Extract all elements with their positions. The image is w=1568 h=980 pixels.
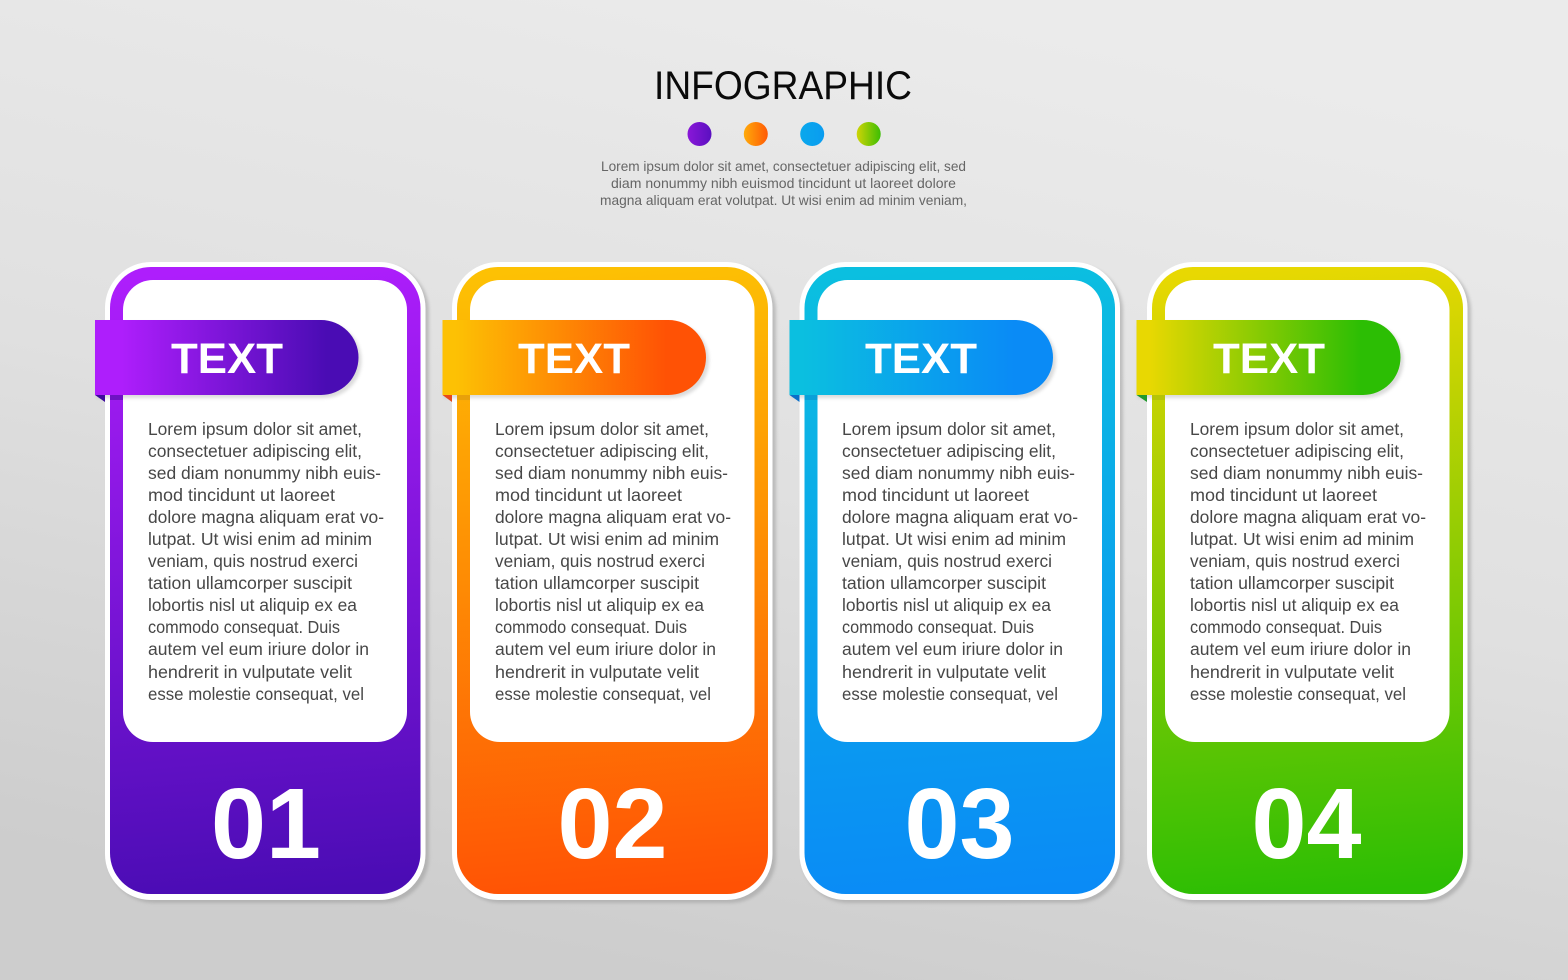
body text: card 01: Lorem ipsum dolor sit amet, — [148, 419, 362, 439]
ribbon: card 02 header — [442, 320, 709, 402]
legend dots — [688, 122, 881, 146]
body text: card 03: dolore magna aliquam erat vo- — [842, 507, 1078, 527]
body text: card 02: lutpat. Ut wisi enim ad minim — [495, 529, 719, 549]
intro text — [600, 159, 967, 208]
body text: card 04: hendrerit in vulputate velit — [1190, 662, 1394, 682]
number 01: 01 — [211, 768, 321, 880]
body text: card 03: hendrerit in vulputate velit — [842, 662, 1046, 682]
body text: card 01: dolore magna aliquam erat vo- — [148, 507, 384, 527]
body text: card 02: hendrerit in vulputate velit — [495, 662, 699, 682]
ribbon: card 01 header — [95, 320, 362, 402]
body text: card 01: autem vel eum iriure dolor in — [148, 639, 369, 659]
body text: card 04: commodo consequat. Duis — [1190, 617, 1382, 637]
body text: card 01: sed diam nonummy nibh euis- — [148, 463, 381, 483]
body text: card 02: consectetuer adipiscing elit, — [495, 441, 709, 461]
body text: card 04: autem vel eum iriure dolor in — [1190, 639, 1411, 659]
panel: card 04 green — [1136, 262, 1471, 903]
body text: card 04 — [1190, 419, 1426, 704]
body text: card 02: autem vel eum iriure dolor in — [495, 639, 716, 659]
body text: card 03: lobortis nisl ut aliquip ex ea — [842, 595, 1051, 615]
body text: card 03 — [842, 419, 1078, 704]
ribbon: card 04 header — [1136, 320, 1404, 402]
body text: card 01: lobortis nisl ut aliquip ex ea — [148, 595, 357, 615]
number 04: 04 — [1252, 768, 1362, 880]
body text: card 02: lobortis nisl ut aliquip ex ea — [495, 595, 704, 615]
body text: card 02: tation ullamcorper suscipit — [495, 573, 699, 593]
panel: card 03 blue — [790, 262, 1123, 903]
body text: card 04: esse molestie consequat, vel — [1190, 684, 1406, 704]
body text: card 01: consectetuer adipiscing elit, — [148, 441, 362, 461]
ribbon: card 02 header: TEXT — [518, 336, 630, 383]
body text: card 02: veniam, quis nostrud exerci — [495, 551, 705, 571]
body text: card 01: mod tincidunt ut laoreet — [148, 485, 335, 505]
body text: card 04: sed diam nonummy nibh euis- — [1190, 463, 1423, 483]
title: INFOGRAPHIC — [654, 64, 912, 108]
body text: card 02: Lorem ipsum dolor sit amet, — [495, 419, 709, 439]
intro text: magna aliquam erat volutpat. Ut wisi enim ad minim veniam, — [600, 193, 967, 208]
body text: card 04: mod tincidunt ut laoreet — [1190, 485, 1377, 505]
body text: card 01: commodo consequat. Duis — [148, 617, 340, 637]
body text: card 03: veniam, quis nostrud exerci — [842, 551, 1052, 571]
ribbon: card 01 header: TEXT — [171, 336, 283, 383]
body text: card 03: mod tincidunt ut laoreet — [842, 485, 1029, 505]
body text: card 01: veniam, quis nostrud exerci — [148, 551, 358, 571]
body text: card 03: autem vel eum iriure dolor in — [842, 639, 1063, 659]
body text: card 03: consectetuer adipiscing elit, — [842, 441, 1056, 461]
body text: card 01: esse molestie consequat, vel — [148, 684, 364, 704]
body text: card 02: commodo consequat. Duis — [495, 617, 687, 637]
body text: card 03: tation ullamcorper suscipit — [842, 573, 1046, 593]
body text: card 04: lobortis nisl ut aliquip ex ea — [1190, 595, 1399, 615]
body text: card 02 — [495, 419, 731, 704]
number 02: 02 — [558, 768, 668, 880]
body text: card 03: esse molestie consequat, vel — [842, 684, 1058, 704]
body text: card 03: lutpat. Ut wisi enim ad minim — [842, 529, 1066, 549]
body text: card 02: esse molestie consequat, vel — [495, 684, 711, 704]
number 03: 03 — [904, 768, 1014, 880]
body text: card 02: sed diam nonummy nibh euis- — [495, 463, 728, 483]
ribbon: card 03 header: TEXT — [865, 336, 977, 383]
body text: card 02: mod tincidunt ut laoreet — [495, 485, 682, 505]
body text: card 04: Lorem ipsum dolor sit amet, — [1190, 419, 1404, 439]
body text: card 04: veniam, quis nostrud exerci — [1190, 551, 1400, 571]
ribbon: card 04 header: TEXT — [1213, 336, 1325, 383]
body text: card 02: dolore magna aliquam erat vo- — [495, 507, 731, 527]
intro text: Lorem ipsum dolor sit amet, consectetuer adipiscing elit, sed — [601, 159, 966, 174]
body text: card 03: Lorem ipsum dolor sit amet, — [842, 419, 1056, 439]
body text: card 01 — [148, 419, 384, 704]
ribbon: card 03 header — [790, 320, 1056, 402]
intro text: diam nonummy nibh euismod tincidunt ut laoreet dolore — [611, 176, 956, 191]
body text: card 01: tation ullamcorper suscipit — [148, 573, 352, 593]
body text: card 03: sed diam nonummy nibh euis- — [842, 463, 1075, 483]
body text: card 04: dolore magna aliquam erat vo- — [1190, 507, 1426, 527]
body text: card 04: tation ullamcorper suscipit — [1190, 573, 1394, 593]
body text: card 03: commodo consequat. Duis — [842, 617, 1034, 637]
body text: card 04: consectetuer adipiscing elit, — [1190, 441, 1404, 461]
panel: card 02 orange — [442, 262, 776, 903]
body text: card 01: hendrerit in vulputate velit — [148, 662, 352, 682]
body text: card 04: lutpat. Ut wisi enim ad minim — [1190, 529, 1414, 549]
body text: card 01: lutpat. Ut wisi enim ad minim — [148, 529, 372, 549]
panel: card 01 purple — [95, 262, 429, 903]
